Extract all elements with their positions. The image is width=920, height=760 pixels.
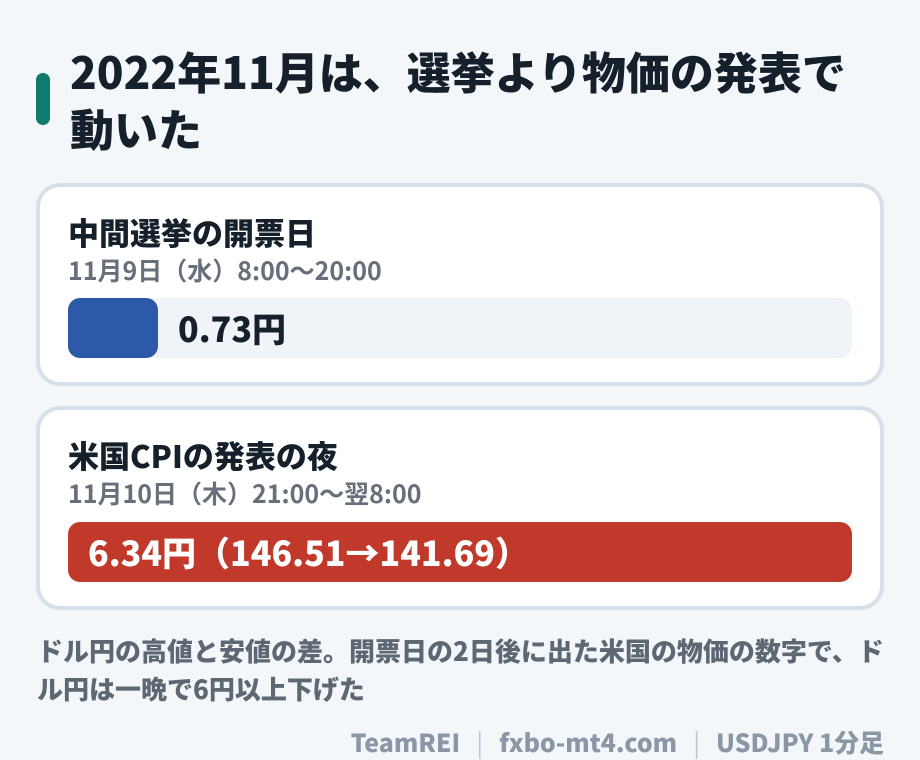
- bar track: election day: [68, 298, 852, 358]
- value: 6.34 yen: 6.34円（146.51→141.69）: [88, 527, 529, 576]
- title accent bar: [36, 73, 50, 125]
- panel: CPI night: [36, 406, 884, 610]
- footer credits: TeamREI | fxbo-mt4.com | USDJPY 1分足: [351, 724, 884, 760]
- time: CPI night: 11月10日（木）21:00〜翌8:00: [68, 475, 422, 511]
- heading: CPI night: 米国CPIの発表の夜: [68, 432, 338, 477]
- panel: election day: [36, 183, 884, 386]
- title: 2022年11月は、選挙より物価の発表で: [70, 38, 846, 102]
- value: 0.73 yen: 0.73円: [178, 303, 286, 352]
- bar fill: 0.73 yen: [68, 298, 158, 358]
- note text: ドル円の高値と安値の差。開票日の2日後に出た米国の物価の数字で、ド: [37, 632, 884, 669]
- time: election day: 11月9日（水）8:00〜20:00: [68, 252, 382, 288]
- note text: [37, 632, 884, 707]
- title: 動いた: [70, 95, 202, 159]
- note text: ル円は一晩で6円以上下げた: [37, 670, 365, 707]
- bar: 6.34 yen: [68, 522, 852, 582]
- heading: election day: 中間選挙の開票日: [68, 209, 316, 254]
- title: [70, 38, 846, 159]
